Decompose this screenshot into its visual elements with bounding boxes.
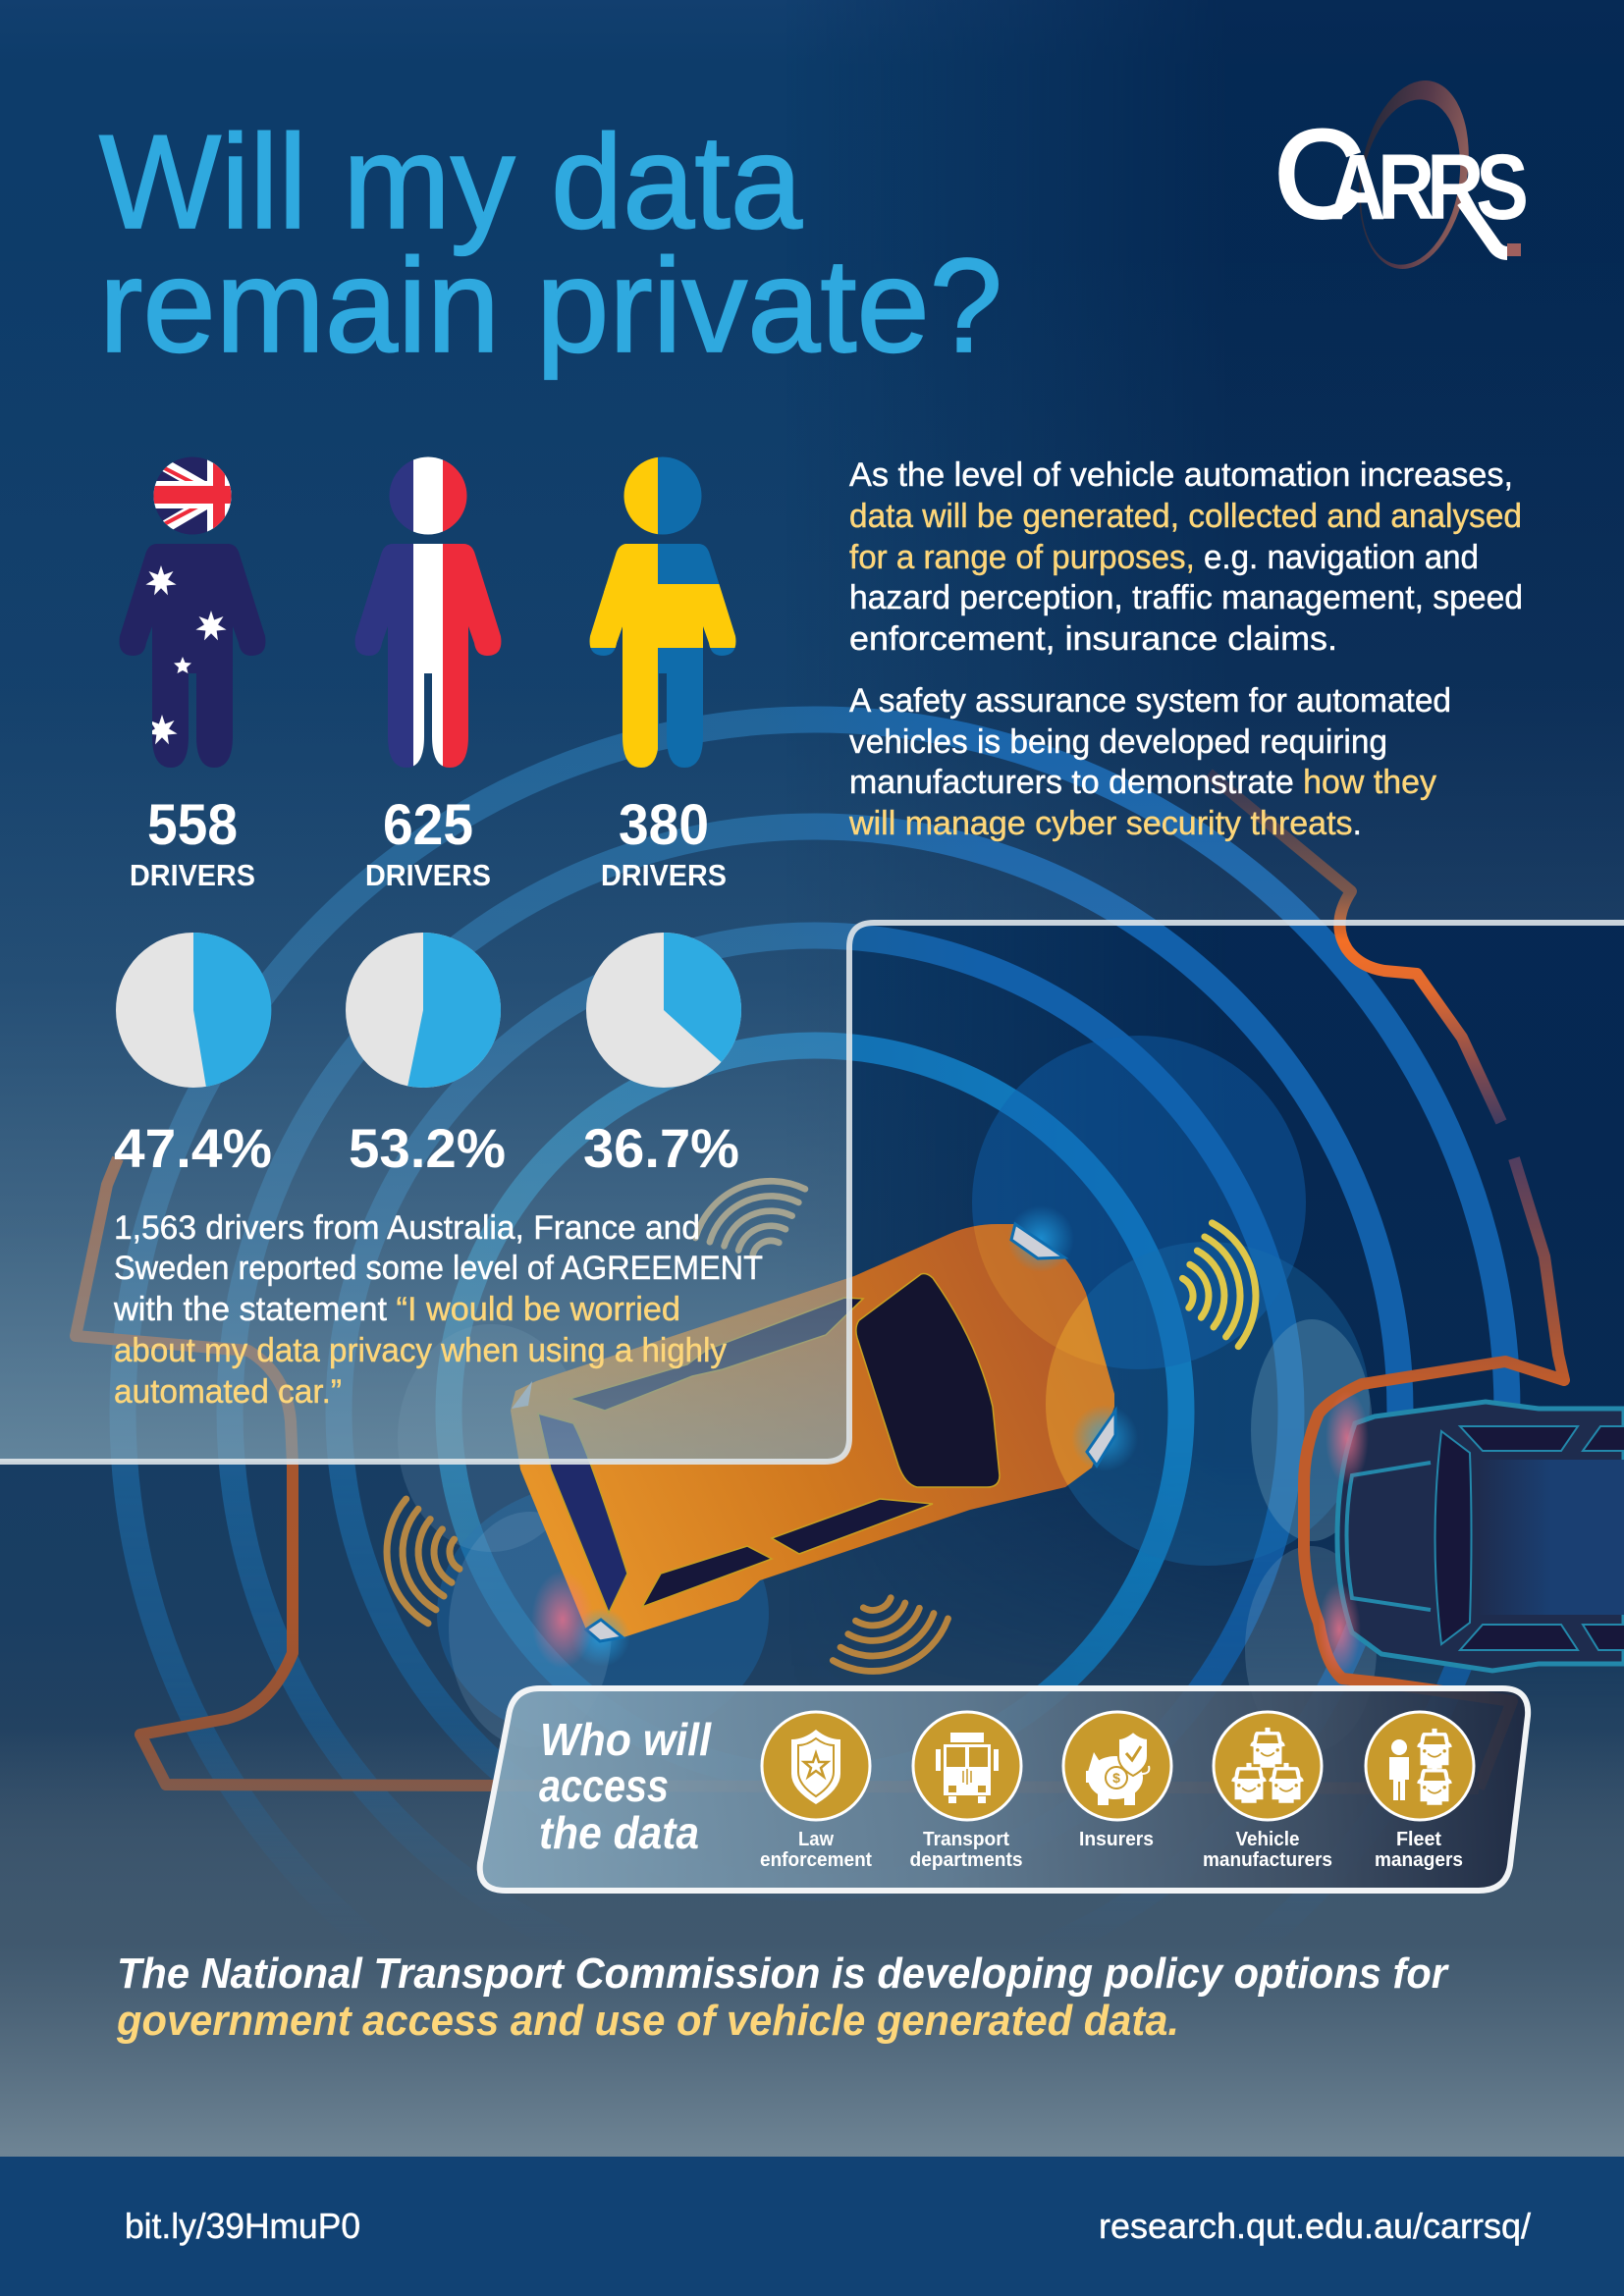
percentages: 36.7% xyxy=(583,1117,739,1179)
person: Australia xyxy=(114,456,271,775)
logo: CARRS xyxy=(1274,72,1529,278)
logo: CARRS: ARRS xyxy=(1328,134,1529,239)
safety assurance paragraph xyxy=(848,682,1451,842)
icon: law enforcement shield xyxy=(762,1712,870,1820)
logo: CARRS: C xyxy=(1274,105,1364,243)
title xyxy=(99,107,1002,380)
windscreen xyxy=(856,1274,1000,1487)
blue car on right xyxy=(1318,1391,1624,1677)
wifi signal: left xyxy=(377,1492,467,1629)
icon labels xyxy=(760,1829,1463,1871)
survey text xyxy=(113,1209,763,1411)
pie chart: Australia 47.4% xyxy=(116,933,271,1088)
pie chart: Sweden 36.7% xyxy=(586,933,741,1088)
safety assurance paragraph: will manage cyber security threats. xyxy=(848,805,1362,842)
headlights xyxy=(512,1205,1138,1667)
France head flag xyxy=(389,456,467,535)
car body xyxy=(511,1224,1114,1637)
rear window xyxy=(538,1414,627,1613)
title: remain private? xyxy=(99,231,1002,380)
icon labels: Fleet xyxy=(1396,1829,1441,1850)
icon labels: enforcement xyxy=(760,1849,872,1871)
background darkening on right xyxy=(911,0,1624,1612)
concentric sensor rings xyxy=(110,707,1520,1861)
policy statement xyxy=(116,1949,1450,2045)
driver counts xyxy=(130,793,727,892)
icon: insurers piggy bank: $ xyxy=(1112,1770,1120,1786)
footer link right: research.qut.edu.au/carrsq/ xyxy=(1099,2206,1531,2246)
survey text: 1,563 drivers from Australia, France and xyxy=(114,1209,700,1247)
orange car xyxy=(511,1209,1135,1667)
wifi signal: bottom xyxy=(820,1581,957,1687)
survey text: about my data privacy when using a highly xyxy=(114,1332,727,1369)
icon: fleet managers xyxy=(1366,1712,1474,1820)
survey text: Sweden reported some level of AGREEMENT xyxy=(114,1250,763,1287)
intro paragraph: for a range of purposes, e.g. navigation and xyxy=(849,539,1479,576)
intro paragraph: As the level of vehicle automation increases, xyxy=(849,456,1513,494)
icon labels: Insurers xyxy=(1079,1829,1154,1850)
road outline xyxy=(76,774,1564,1789)
car highlights xyxy=(974,1224,1114,1485)
intro paragraph: enforcement, insurance claims. xyxy=(849,620,1337,658)
pie chart: France 53.2% xyxy=(346,933,501,1088)
icon labels: manufacturers xyxy=(1203,1849,1332,1871)
panel heading xyxy=(539,1714,712,1858)
blue car windows xyxy=(1435,1426,1624,1650)
footer xyxy=(0,2157,1624,2296)
driver counts: 625 xyxy=(383,793,473,857)
footer link left: bit.ly/39HmuP0 xyxy=(125,2206,360,2246)
bottom fade xyxy=(0,1728,1624,2157)
intro paragraph: data will be generated, collected and analysed xyxy=(849,498,1522,535)
icon: vehicle manufacturers cars xyxy=(1214,1712,1322,1820)
intro paragraph: hazard perception, traffic management, speed xyxy=(849,579,1523,616)
blue car body xyxy=(1337,1402,1624,1671)
person: France xyxy=(350,456,507,775)
policy statement: The National Transport Commission is developing policy options for xyxy=(117,1949,1450,1998)
Sweden head flag xyxy=(623,456,702,535)
icon labels: Vehicle xyxy=(1235,1829,1300,1850)
France body flag xyxy=(355,544,501,768)
side windows xyxy=(569,1298,933,1607)
safety assurance paragraph: manufacturers to demonstrate how they xyxy=(849,764,1436,801)
pink glows xyxy=(1318,1391,1369,1677)
icon labels: departments xyxy=(909,1849,1023,1871)
Sweden body flag xyxy=(589,544,736,768)
driver counts: DRIVERS xyxy=(601,858,727,892)
driver counts: 558 xyxy=(147,793,238,857)
roof xyxy=(1478,1460,1624,1615)
safety assurance paragraph: A safety assurance system for automated xyxy=(849,682,1451,720)
panel heading: Who will xyxy=(540,1714,712,1765)
panel heading: access xyxy=(539,1760,669,1811)
percentages: 53.2% xyxy=(349,1117,506,1179)
intro paragraph xyxy=(849,456,1523,658)
safety assurance paragraph: vehicles is being developed requiring xyxy=(849,723,1387,761)
icon labels: managers xyxy=(1375,1849,1463,1871)
hood lines xyxy=(1347,1463,1431,1610)
percentages: 47.4% xyxy=(114,1117,272,1179)
survey text: automated car.” xyxy=(114,1373,342,1411)
driver counts: DRIVERS xyxy=(130,858,255,892)
panel: who will access the data xyxy=(480,1688,1528,1891)
driver counts: 380 xyxy=(619,793,709,857)
icon labels: Law xyxy=(798,1829,834,1850)
wifi signal: front xyxy=(1172,1217,1267,1355)
panel frame xyxy=(0,923,1624,1462)
Australia body flag xyxy=(120,544,265,768)
panel shape xyxy=(480,1688,1528,1891)
wifi signal: top xyxy=(684,1163,821,1273)
icon labels: Transport xyxy=(923,1829,1009,1850)
Australia head flag xyxy=(153,457,232,534)
tail glow xyxy=(531,1571,594,1669)
panel heading: the data xyxy=(539,1807,699,1858)
survey text: with the statement “I would be worried xyxy=(113,1291,680,1328)
title: Will my data xyxy=(99,107,802,256)
icon: transport bus xyxy=(913,1712,1021,1820)
sensor coverage blobs xyxy=(398,1036,1377,1752)
percentages xyxy=(114,1117,739,1179)
driver counts: DRIVERS xyxy=(365,858,491,892)
policy statement: government access and use of vehicle generated data. xyxy=(116,1997,1179,2045)
icon: insurers piggy bank xyxy=(1063,1712,1171,1820)
person: Sweden xyxy=(584,456,741,775)
veil over top and left panel xyxy=(0,0,1624,1462)
